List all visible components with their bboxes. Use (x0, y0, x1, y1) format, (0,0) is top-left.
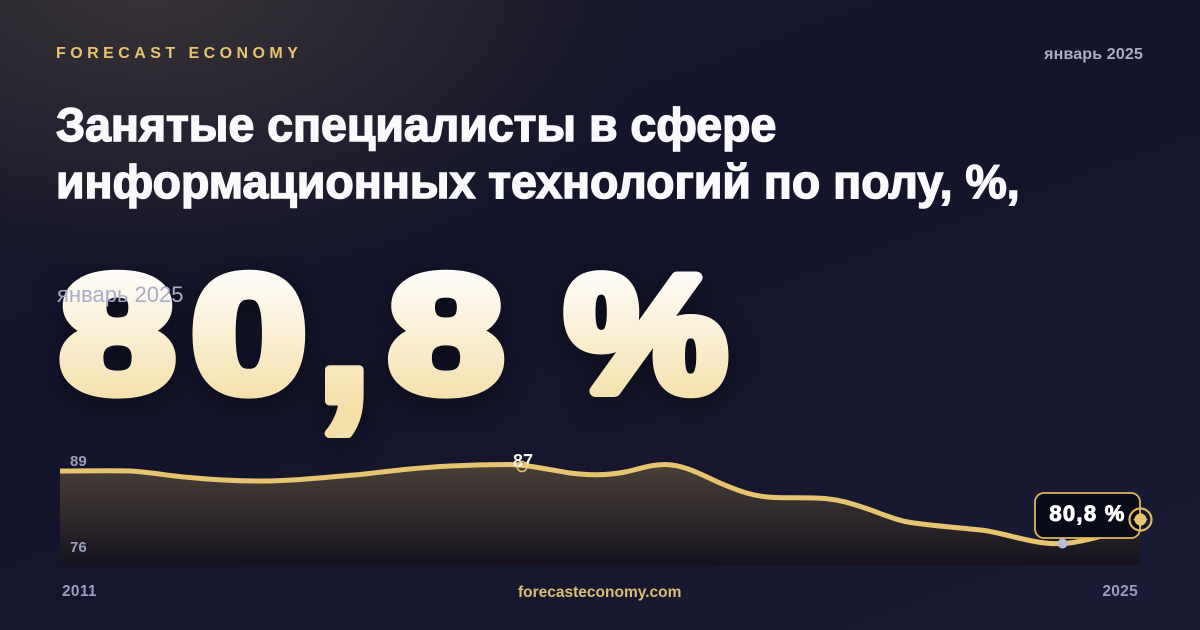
value tooltip: 80,8 % (1049, 501, 1126, 526)
start year: 2011 (62, 583, 97, 600)
title: информационных технологий по полу, %, (56, 155, 1020, 208)
big value: 8 (389, 241, 503, 426)
line (60, 464, 1140, 544)
subtitle date over value: январь 2025 (57, 282, 184, 307)
big value: 0 (192, 241, 306, 426)
area fill (60, 464, 1140, 565)
end year: 2025 (1102, 583, 1138, 600)
value tooltip (1035, 493, 1140, 538)
min marker (1058, 538, 1068, 548)
source url: forecasteconomy.com (518, 584, 681, 601)
date top right: январь 2025 (1044, 46, 1143, 63)
axis max label: 89 (70, 453, 87, 470)
big value: 8 (60, 241, 175, 426)
brand label: FORECAST ECONOMY (56, 45, 302, 62)
title: Занятые специалисты в сфере (56, 98, 776, 151)
big value: , (315, 211, 373, 446)
endpoint marker (1130, 508, 1152, 530)
title (56, 98, 1020, 209)
axis min label: 76 (70, 539, 87, 556)
peak label and marker: 87 (513, 451, 533, 471)
big value: % (565, 242, 727, 426)
